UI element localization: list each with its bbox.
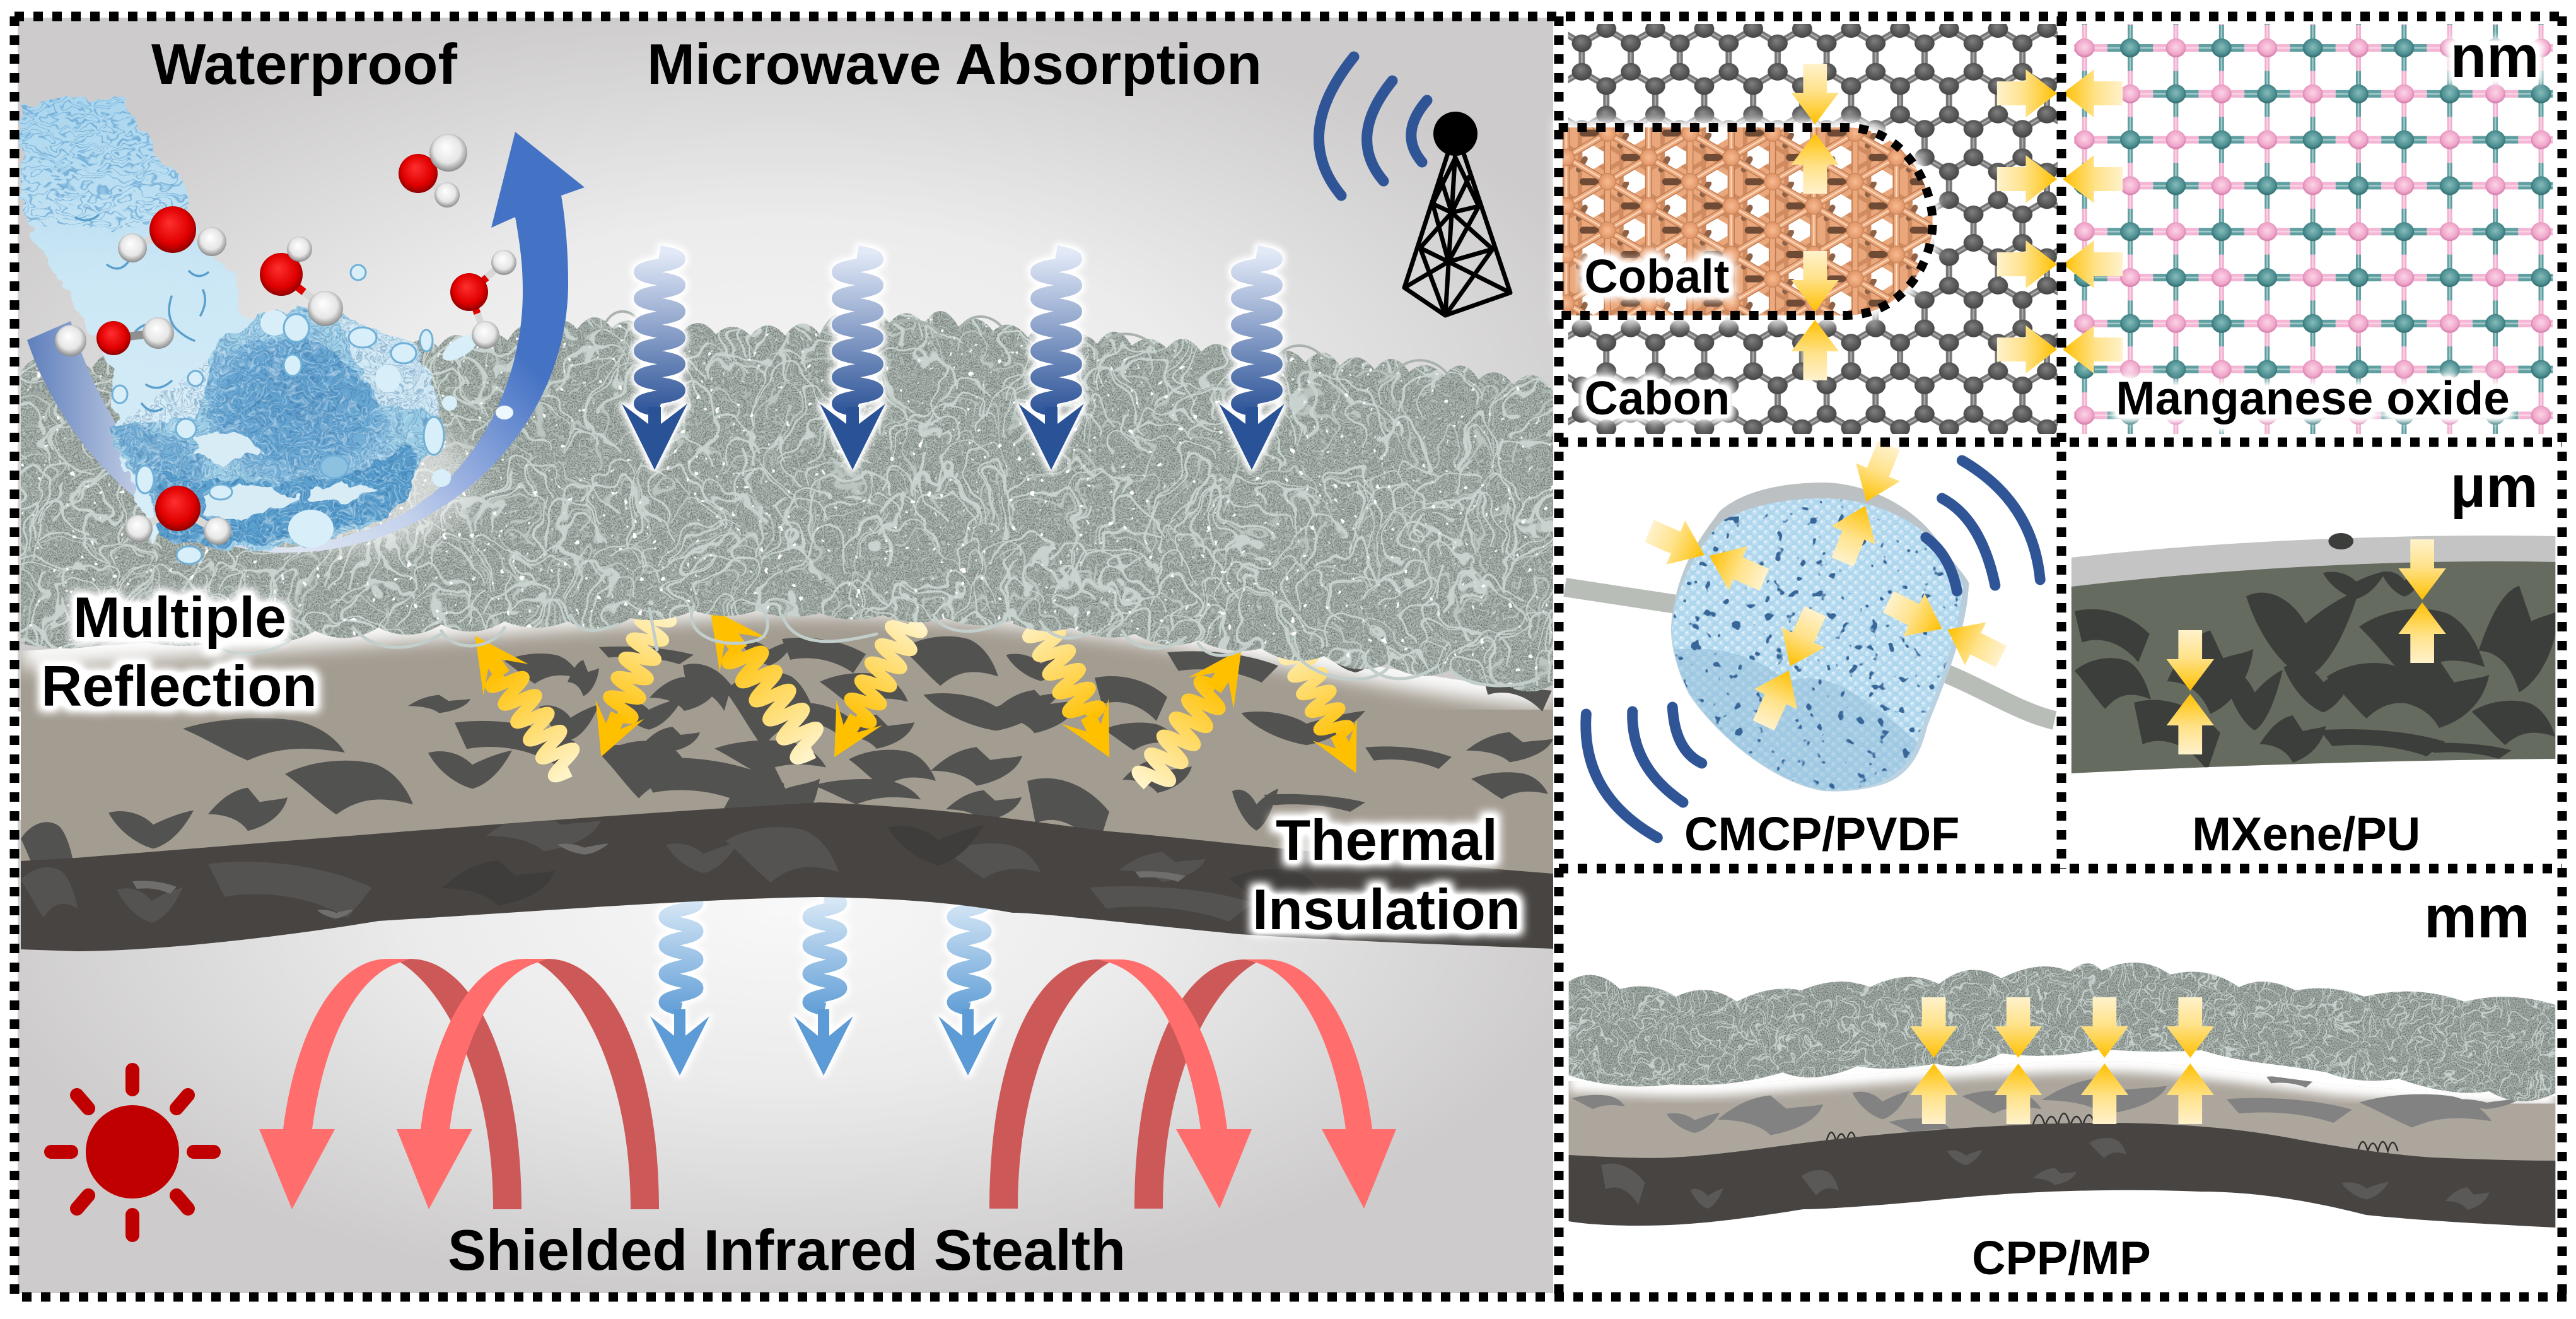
manganese oxide lattice: [2074, 24, 2553, 434]
lower background: [18, 820, 1553, 1293]
graphene lattice: [1568, 24, 2058, 434]
arrows: foam interface: [2167, 539, 2446, 754]
signal arcs: [1319, 57, 1427, 196]
icon: blue reflection swoosh arrow: [27, 132, 585, 553]
panel: main composite scene: [0, 18, 1602, 1293]
water molecules: [55, 134, 516, 545]
label: Thermal Insulation: Insulation: [1252, 878, 1520, 942]
molecule 3: [260, 237, 343, 326]
cobalt nanoparticle lattice: [1559, 123, 1937, 319]
layer: dark absorbing film: [21, 802, 1553, 951]
arrows: particle interface: [1640, 437, 2012, 736]
label: Multiple Reflection: Reflection: [41, 655, 317, 718]
layer: porous tan foam with flakes: [21, 597, 1553, 889]
label: nm: nm: [2451, 23, 2539, 90]
blue microwave wave arrows: [622, 252, 1285, 470]
cobalt dashed outline: [1559, 127, 1933, 315]
cobalt halo: [1563, 127, 1933, 315]
label: CPP/MP: CPP/MP: [1972, 1231, 2151, 1284]
heading: Microwave Absorption: Microwave Absorption: [647, 33, 1262, 97]
stream body: [21, 95, 259, 542]
panel: nm carbon and cobalt lattice: [1559, 24, 2058, 434]
layer: fibre aerogel network: [0, 252, 1602, 757]
molecule 1: [399, 134, 467, 208]
panel: CMCP/PVDF particle: [1565, 437, 2054, 860]
label: mm: mm: [2424, 884, 2530, 951]
yellow wave arrows: multiple reflection: [453, 592, 1378, 801]
arrows: layer interface: [1910, 997, 2214, 1124]
molecule 2: [118, 206, 226, 262]
infrared reflection arcs: left pair: [259, 959, 659, 1209]
microwave arcs: [1586, 460, 2040, 838]
panel: nm manganese oxide lattice: [1997, 23, 2553, 434]
icon: sun: [51, 1070, 214, 1235]
porous particle body: [1664, 492, 1970, 795]
heading: Shielded Infrared Stealth: Shielded Infrared Stealth: [448, 1219, 1126, 1282]
label: CMCP/PVDF: CMCP/PVDF: [1684, 807, 1959, 860]
molecule 6: [125, 486, 231, 545]
label: Manganese oxide: Manganese oxide: [2116, 372, 2510, 425]
upper background: [18, 18, 1553, 712]
molecule 5: [55, 317, 174, 356]
foam top strip: [2072, 536, 2555, 590]
right column: scale panels: [1539, 23, 2576, 1284]
water haze: [233, 410, 473, 549]
fibre layer: [1539, 921, 2576, 1135]
splash body: [115, 307, 438, 549]
icon: water stream and splash: [18, 91, 513, 564]
infrared reflection arcs: right pair: [989, 959, 1396, 1209]
foam body with flakes: [2072, 533, 2560, 773]
splash droplets: [112, 265, 513, 564]
panel: CPP/MP film stack: [1539, 884, 2576, 1284]
label: Cobalt: Cobalt: [1584, 250, 1729, 303]
tower: [1404, 112, 1510, 315]
label: Thermal Insulation: [1252, 809, 1520, 942]
icon: antenna tower with signal arcs: [1319, 57, 1510, 315]
arrows: cobalt-carbon interface: [1792, 64, 1839, 380]
fibre strand: [1565, 587, 2054, 720]
label: Cabon: Cabon: [1584, 372, 1730, 425]
stream ripples: [76, 215, 208, 411]
arrows: heterointerface: [1997, 69, 2123, 373]
label: MXene/PU: MXene/PU: [2192, 807, 2420, 860]
label: μm: μm: [2451, 454, 2538, 520]
layer: lower infrared wave arrows: [650, 896, 998, 1076]
dark layer: [1569, 1123, 2555, 1228]
panel: MXene/PU foam section: [2072, 454, 2560, 860]
label: Multiple Reflection: [41, 586, 317, 718]
particle shell: [1671, 483, 1969, 791]
label: Thermal Insulation: Thermal: [1276, 809, 1498, 872]
molecule 4: [450, 250, 516, 349]
label: Multiple Reflection: Multiple: [73, 586, 286, 650]
tan layer: [1569, 1061, 2555, 1167]
heading: Waterproof: Waterproof: [151, 33, 458, 97]
